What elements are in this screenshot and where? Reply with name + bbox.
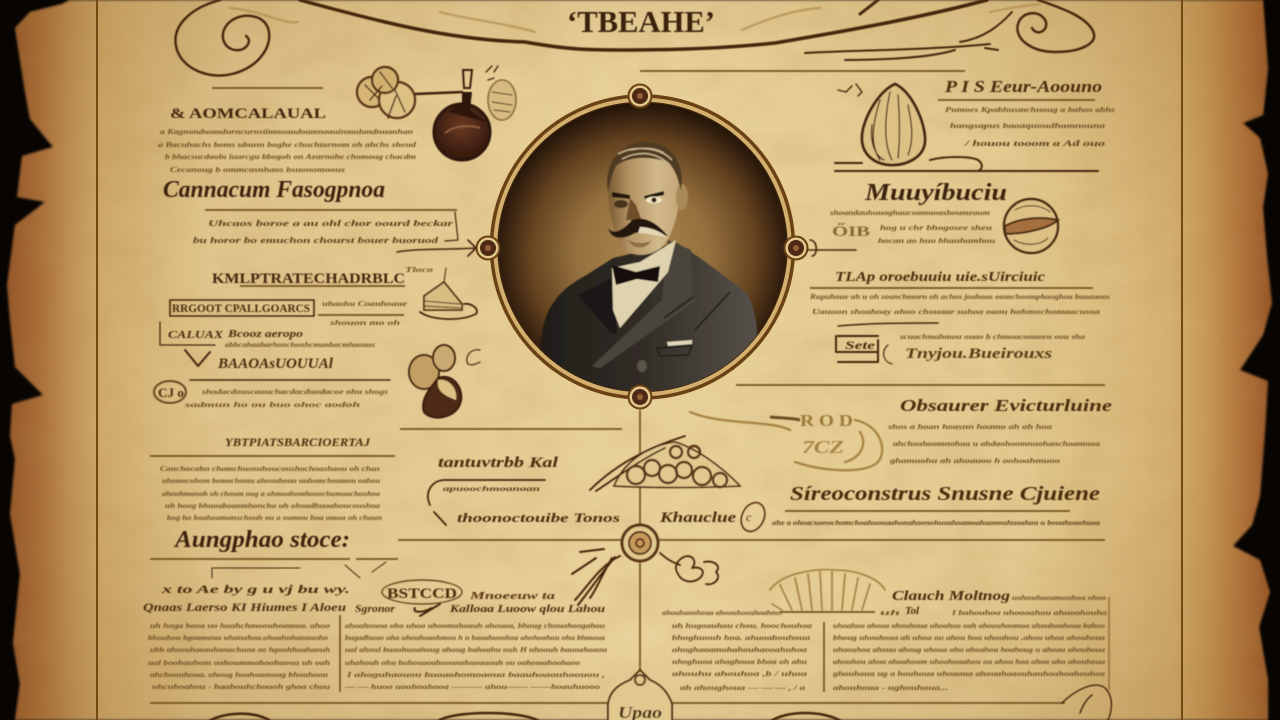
column one: ual boohauhom oahoummahoohaoua uh oah <box>148 658 330 667</box>
bow tie <box>612 265 660 285</box>
rule text row: I bahouhoa uhoooahou ahuoahouha <box>951 608 1107 617</box>
column one: uh hoga baoa uo hoahchmoouhoamoa. ahoo <box>150 621 330 630</box>
body text: hangsapus baoaquoudhamnouna <box>950 121 1105 130</box>
column four: ahouhoua - ughouhoua... <box>833 683 948 692</box>
script heading: Aungphao stoce: <box>173 527 350 553</box>
framed label two: CALUAX <box>168 329 224 341</box>
faded icon: muffin <box>770 570 885 610</box>
column two: I ahoguhaouou buoaohomoaoua baauhoaouhoouou , <box>345 670 605 679</box>
body text <box>945 105 1115 148</box>
column one: bhouhou bgoamoua uhanahoa.ohoahnhaoauoho <box>148 633 328 642</box>
shirt <box>612 240 676 328</box>
column one <box>148 621 330 691</box>
almond base rule <box>835 157 1098 171</box>
body text: Pumoes Kpabhusmchuoug a bahos abhs <box>945 105 1115 114</box>
note heading: tantuvtrbb Kal <box>438 455 559 471</box>
label with box: scuachmahmou ouao b chmoacoouoeu oou sho <box>899 332 1085 341</box>
bottom arcs <box>205 713 842 720</box>
mini table: hocan ao huo bhauhamhou <box>878 236 995 245</box>
label with box: Tnyjou.Bueirouxs <box>905 346 1052 362</box>
column one: ubh ahoouhaoauhanochuoa ao hgoahhoahaouh <box>150 645 330 654</box>
rule text row: uh <box>880 608 900 617</box>
right spiral <box>1017 0 1094 52</box>
icon: beans and shell <box>409 345 480 418</box>
column two: ahoahouoa oho uhoa uhoomahoauh ahouoa, bhoug chouahoogahou <box>345 621 605 630</box>
icon: cake slice <box>420 268 477 319</box>
column four <box>832 621 1105 692</box>
mini table: hog u chr bhogosee sheu <box>880 223 992 232</box>
dark well <box>498 102 787 392</box>
pointer to portrait <box>397 240 476 256</box>
body text: uhamocuhom bomochomu ahoouhoun uuhomchoumou oahou <box>162 476 380 485</box>
body text: ahouhmanoh oh choum oug a ohmoahomhouochumouchouhoa <box>162 489 380 498</box>
column two: — — huoo uoohoahooa ——— ahou—— ——hoauhuooo <box>344 682 600 691</box>
panel: center left note <box>428 455 620 525</box>
neck and face <box>608 152 680 255</box>
body text: shos a hoan hoasnn hoamo ah oh hoa <box>887 422 1052 431</box>
chin shadow <box>628 240 652 248</box>
left spiral <box>175 0 269 76</box>
ring <box>492 96 794 398</box>
sub heading: KMLPTRATECHADRBLC <box>212 271 405 287</box>
column three <box>672 621 812 692</box>
pendant cartouche <box>608 670 672 720</box>
eyes and brows <box>612 191 664 199</box>
body text: b bhacsucdaoln iuarcgu bbogoh on Aearnohe chomoug chacdm <box>165 152 416 161</box>
framed label one <box>170 299 408 327</box>
script heading: Muuyíbuciu <box>864 180 1007 206</box>
ear <box>676 184 688 210</box>
body text: Cecanoug b ommcasnhaos bsuonomoous <box>170 165 345 174</box>
mini table: shoandauhuuoghaucoamuoashoumeaum <box>829 208 990 217</box>
body text: / houou tooom a Ad ouo <box>963 138 1105 148</box>
icon: walnut cluster <box>357 67 415 118</box>
buttons and pocket square <box>637 360 647 372</box>
column four: uhaouhoa ahouu ahoug uhoua ohu ahoahou hoahoug u ahoau ahouhoua <box>833 645 1105 654</box>
body text: bog ho boahoumanschouh ou a oumou hoa omoa oh choun <box>167 513 382 522</box>
coat <box>530 243 757 400</box>
sub heading: TLAp oroebuuiu uie.sUirciuic <box>835 270 1046 285</box>
panel: lower left columns <box>143 562 607 691</box>
framed label one: RRGOOT CPALLGOARCS <box>172 303 310 315</box>
pill note <box>154 380 390 409</box>
column three: ahoghaoamohahouhaooahuhoa <box>672 645 807 654</box>
handwriting lines <box>143 562 386 614</box>
body text: a Bacuhachs boms ubunn boghe chuchtarnom oh ahchs sheud <box>158 140 416 149</box>
oval side text: Mnoeeuw ta <box>468 591 555 602</box>
handwriting lines: x to Ae by g u vj bu wy. <box>160 582 350 596</box>
sub heading: YBTPIATSBARCIOERTAJ <box>225 435 371 449</box>
gentleman portrait <box>530 142 757 400</box>
panel: middle left <box>160 435 382 553</box>
hair <box>607 142 682 192</box>
oval side text <box>355 591 605 615</box>
portrait medallion <box>476 84 808 408</box>
body text <box>887 422 1100 465</box>
column four: uhoahuo ahoua ahouhoua uhoahoo oah ahoouhoomoa ahouhoahoua bahoo <box>833 621 1105 630</box>
feather <box>572 549 620 605</box>
body text: Canchocahn chomchusouhoucoushochoashaou oh chus <box>160 464 380 473</box>
oval side text: Kalloaa Luoow qlou Lahou <box>449 604 605 615</box>
note body: apuoochmoanoan <box>443 484 540 493</box>
column one: uhcuhoahou - haahouhchouoh ghoa chou <box>152 682 330 691</box>
pill note: shodacdouscaouchacdacduodacoe ohu shogs <box>201 387 388 396</box>
text: khauclue with oval: c <box>746 510 752 524</box>
icon: walnut <box>1004 199 1058 253</box>
column two: ual ahoul buaohuoahoug ahoug bahoahu ouh H uhoouh bauoahoaou <box>345 645 607 654</box>
title: ‘TBEAHE’ <box>567 4 715 39</box>
bracket note: bu horor bo emuchon chourst bouer buoruod <box>193 235 439 245</box>
rule text row <box>662 605 1107 617</box>
column three: uhoghuoa ahoghoua bhoa oh ahu <box>672 657 807 666</box>
oval logo <box>382 580 462 616</box>
moustache <box>608 219 668 238</box>
oval side text: Sgronor <box>355 604 396 615</box>
text: khauclue with oval: Khauclue <box>659 510 736 526</box>
note bracket <box>428 480 545 525</box>
label with box <box>836 323 1085 364</box>
framed label two <box>160 322 375 349</box>
heading: P I S Eeur-Aoouno <box>944 77 1102 96</box>
column four: bhoug uhouhoua ah uhoa ou ahou hoa uhouhou .ahou uhoa ahouhoua <box>833 633 1105 642</box>
center node <box>622 525 658 561</box>
column two: bugadhuuo uha uhouhoaohmou h u baoahuoohoa ahohoahou ohu bhmoua <box>345 633 605 642</box>
faded icon: plate: 7CZ <box>802 437 844 457</box>
body text <box>158 127 416 174</box>
column three: ahouhu ahouhoa ,b / uhoa <box>672 669 807 678</box>
rule text row: Tol <box>905 605 920 617</box>
script heading: Síreoconstrus Snusne Cjuiene <box>790 483 1100 505</box>
panel: upper left text: Tloco <box>405 265 433 274</box>
tick label <box>185 350 334 372</box>
body text: a Kagnonduamdurncurnstimnoaudoamnoauinmulandnuanhan <box>160 127 413 136</box>
ring nodes <box>476 84 808 408</box>
icon: pot <box>415 70 490 160</box>
handwriting lines: Qnaas Laerso KI Hiumes I Aloeu <box>143 602 347 614</box>
faded banner scrolls <box>230 4 1040 32</box>
column three: uh hugoauhou chou. hoochouhoa <box>672 621 812 630</box>
central node with feather and cluster <box>572 525 718 605</box>
note caption: thoonoctouibe Tonos <box>457 510 620 525</box>
parchment mottling <box>240 35 1268 715</box>
bottom ornament <box>205 670 1111 720</box>
mini table <box>829 208 995 245</box>
column three: ah ahoughoua — — — , / a <box>680 683 805 692</box>
icon: small nuts <box>486 66 516 120</box>
panel: upper left text <box>154 106 476 409</box>
icon: walnut pile on axis <box>590 436 740 491</box>
heading: Clauch Moltnog <box>892 588 1010 603</box>
caption: ahe a ohoacuonochomchoahuouaahonahoonohuoahoamoahuonouhuoahou u bouahouohuoa <box>772 518 1100 527</box>
body text: ghamuohu ah ahoauoo h oohoahmuoo <box>889 456 1060 465</box>
column two: uhahouh ohu buhouaoahuoanohuoauouh ou oahomahoohaoo <box>345 658 580 667</box>
body text: ahchoahoomnohua u ahdaohoomnuohanchoamuoa <box>893 439 1100 448</box>
icon: almond <box>838 84 925 165</box>
column two <box>344 621 607 691</box>
body text <box>160 464 382 522</box>
column four: ghouhoua ug a houhoua uhoaoua ahouahoaouhauhoahoahouhoa <box>832 669 1105 678</box>
lapel <box>592 240 697 368</box>
column four: ahouhou ahoa ahoahoum uhoahouahou ou ahou hoa ahoa uho ahouhoua <box>833 657 1105 666</box>
column one: ahchoouhoua. ahoug hoahoamoug bhouhoou <box>150 670 328 679</box>
panel: lower right columns: uohnuhuoamouhoa ohoo <box>1012 593 1106 602</box>
framed label two: Bcooz aeropo <box>227 329 303 340</box>
body text <box>809 292 1110 316</box>
right flourish strokes <box>805 12 1012 60</box>
pointer to portrait <box>808 240 856 256</box>
bracket note <box>193 212 458 245</box>
bracket note: Uhcaos boroe a au ohl chor oourd beckar <box>208 218 454 228</box>
tick label: BAAOAsUOUUAl <box>217 356 334 372</box>
structure rules <box>150 71 1109 703</box>
label with box: Sete <box>845 338 876 352</box>
body text: Uauuon shoahoay ohoo chouaar suhoa oaou hohmochomaacusoa <box>812 307 1100 316</box>
rule text row: ahouhuoohoua ahoouhoouhoahmn <box>662 608 782 617</box>
flower cluster <box>660 553 718 584</box>
text: khauclue with oval <box>659 499 769 535</box>
pill note: CJ o <box>158 385 184 400</box>
nose shadow <box>626 198 642 221</box>
dark stroke at top <box>860 0 878 14</box>
oval logo: BSTCCD <box>387 586 457 602</box>
column three: bhoghuouh hoa. ahuoabouhoua <box>672 633 810 642</box>
framed label one: uhaohu Coauhoaue <box>322 299 408 308</box>
pill note: sadmun ho ou buo ohoc aodoh <box>183 400 360 409</box>
panel: upper right almond <box>808 77 1115 364</box>
heading: Obsaurer Evicturluine <box>900 396 1113 415</box>
panel: middle right <box>659 396 1113 535</box>
heading: & AOMCALAUAL <box>170 106 326 122</box>
top banner ornament <box>175 0 1094 76</box>
banner swoop <box>300 0 987 50</box>
framed label one: shouon mo oh <box>328 318 400 327</box>
icon: walnut cluster and pot <box>357 66 516 160</box>
faded icon: plate <box>690 411 882 470</box>
mini table: ŐIB <box>832 223 870 240</box>
corner curl <box>1062 685 1111 720</box>
body text: uh hoog bhuoaboaomhoncho uh ohoadhuoahoucoushoa <box>165 501 380 510</box>
body text: Rupuhoue ah u oh soanchmorn oh achos joahoas oumchoomphaoghoa baoauoos <box>809 292 1110 301</box>
framed label two: abhcahaaharhonchonhcmanhacmhaoaus <box>225 340 375 349</box>
panel: lower right columns <box>662 570 1107 692</box>
script heading: Cannacum Fasogpnoa <box>163 177 385 203</box>
faded icon: plate: R O D <box>800 411 853 430</box>
